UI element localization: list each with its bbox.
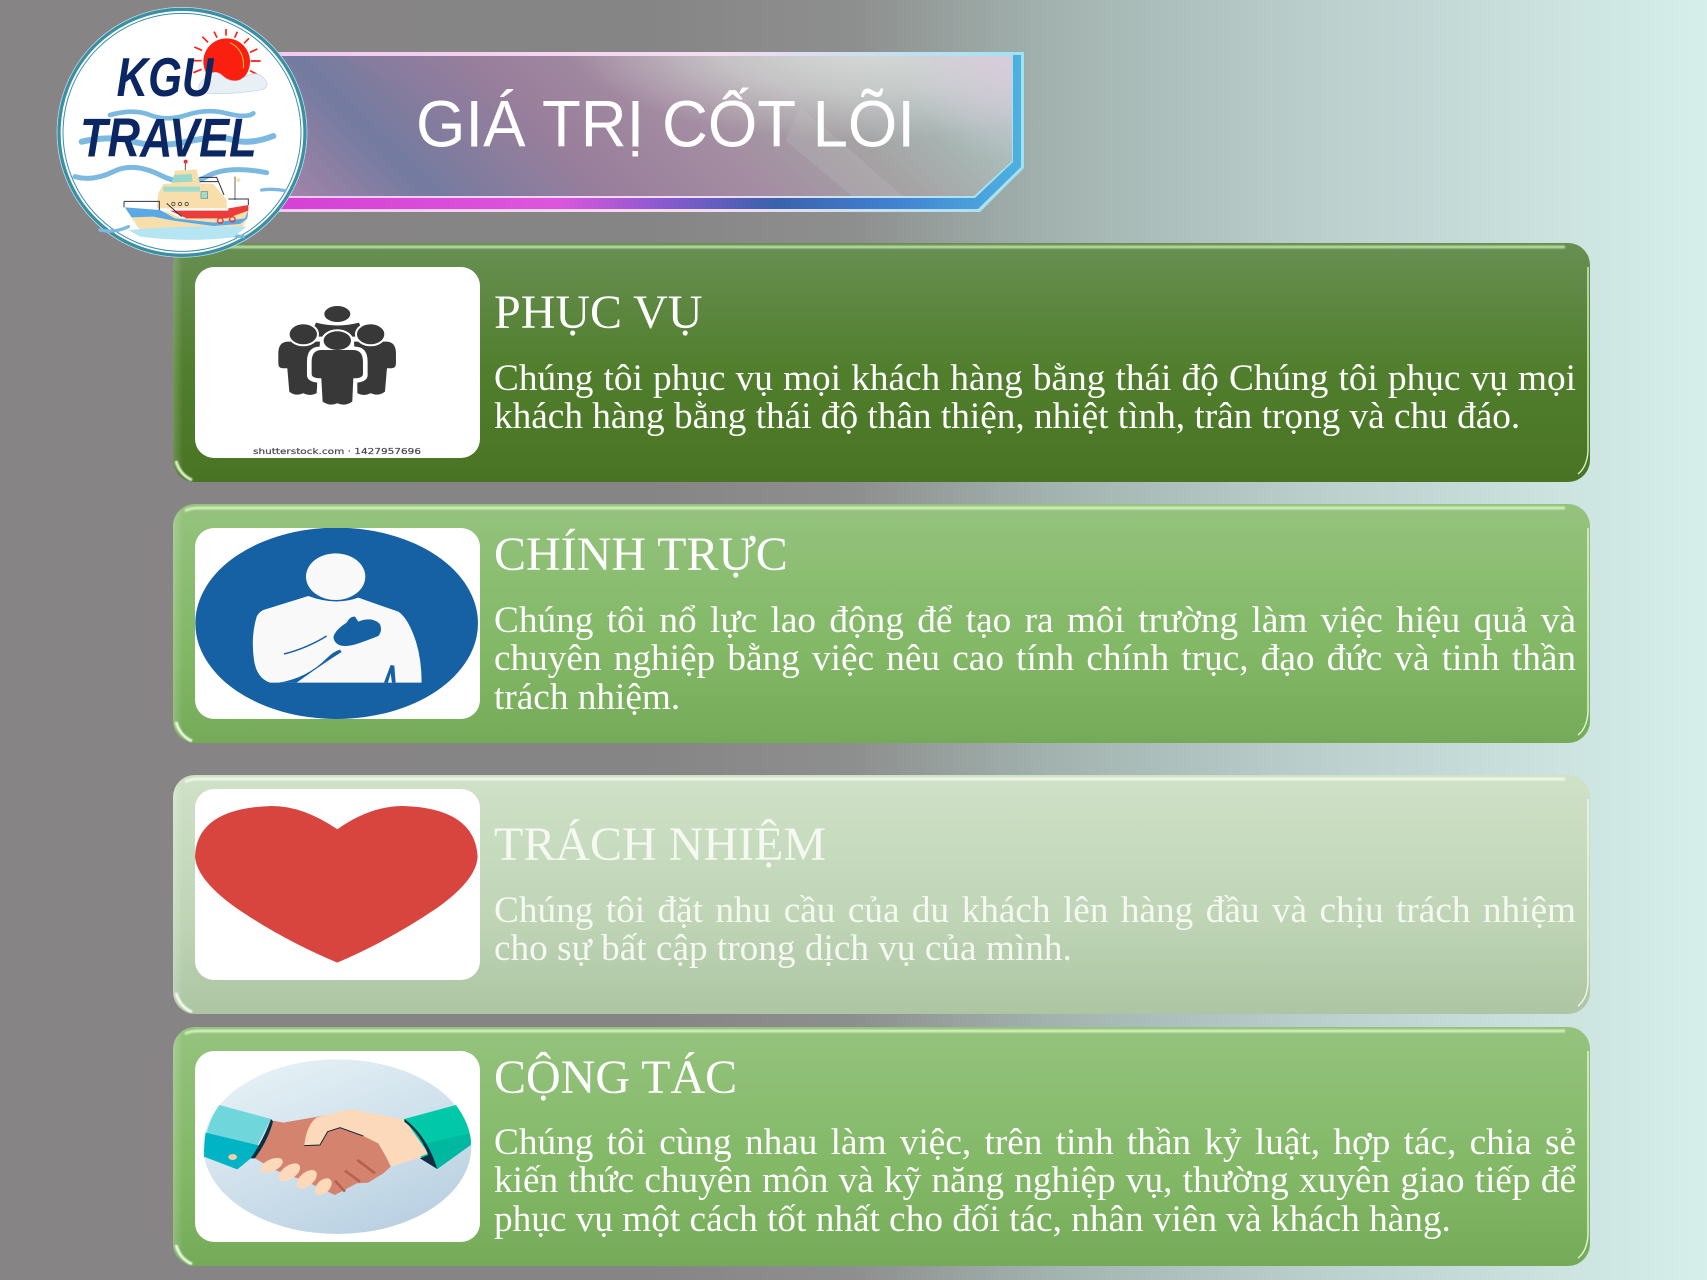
- left cuff and hand: [204, 1105, 271, 1169]
- icon: hand on heart: [195, 528, 480, 719]
- logo text: KGU: [117, 46, 214, 108]
- panel: chính trực: [173, 504, 1590, 743]
- heading text: GIÁ TRỊ CỐT LÕI: [416, 86, 915, 160]
- text: cộng tác: kiến thức chuyên môn và kỹ năng nghiệp vụ, thường xuyên giao tiếp để: [494, 1160, 1576, 1201]
- waves: [75, 111, 285, 237]
- heading: chính trực: CHÍNH TRỰC: [494, 528, 788, 580]
- ship: [124, 160, 248, 240]
- icon: heart: [195, 789, 480, 980]
- text: trách nhiệm: cho sự bất cập trong dịch vụ của mình.: [494, 928, 1072, 969]
- logo: KGU Travel: [56, 7, 308, 258]
- icon: group of people: [195, 267, 480, 458]
- text: cộng tác: Chúng tôi cùng nhau làm việc, trên tinh thần kỷ luật, hợp tác, chia sẻ: [494, 1122, 1576, 1162]
- icon: handshake: [195, 1051, 480, 1242]
- text: cộng tác: [494, 1122, 1576, 1240]
- title banner: [278, 52, 1024, 212]
- text: chính trực: [494, 600, 1576, 718]
- text: phục vụ: khách hàng bằng thái độ thân thiện, nhiệt tình, trân trọng và chu đáo.: [494, 396, 1520, 437]
- sun: [192, 29, 261, 91]
- watermark text: shutterstock.com · 1427957696: [253, 447, 421, 456]
- panel: trách nhiệm: [173, 775, 1590, 1014]
- text: phục vụ: [494, 358, 1576, 437]
- text: cộng tác: phục vụ một cách tốt nhất cho đối tác, nhân viên và khách hàng.: [494, 1198, 1451, 1240]
- text: trách nhiệm: Chúng tôi đặt nhu cầu của du khách lên hàng đầu và chịu trách nhiệm: [494, 890, 1576, 930]
- logo text: TRAVEL: [80, 107, 257, 169]
- logo text: [80, 46, 257, 169]
- heading: trách nhiệm: TRÁCH NHIỆM: [494, 818, 826, 871]
- right cuff and hand: [304, 1109, 428, 1167]
- text: trách nhiệm: [494, 890, 1576, 969]
- text: phục vụ: Chúng tôi phục vụ mọi khách hàng bằng thái độ Chúng tôi phục vụ mọi: [494, 358, 1576, 398]
- fingers: [258, 1155, 335, 1198]
- text: chính trực: trách nhiệm.: [494, 676, 680, 718]
- panel: phục vụ: [173, 243, 1590, 482]
- cloud: [199, 72, 267, 94]
- heading: cộng tác: CỘNG TÁC: [494, 1050, 737, 1104]
- text: chính trực: Chúng tôi nổ lực lao động để tạo ra môi trường làm việc hiệu quả và: [494, 600, 1576, 640]
- text: chính trực: chuyên nghiệp bằng việc nêu cao tính chính trục, đạo đức và tinh thần: [494, 638, 1576, 679]
- heading: phục vụ: PHỤC VỤ: [494, 286, 702, 339]
- panel: cộng tác: [173, 1027, 1590, 1266]
